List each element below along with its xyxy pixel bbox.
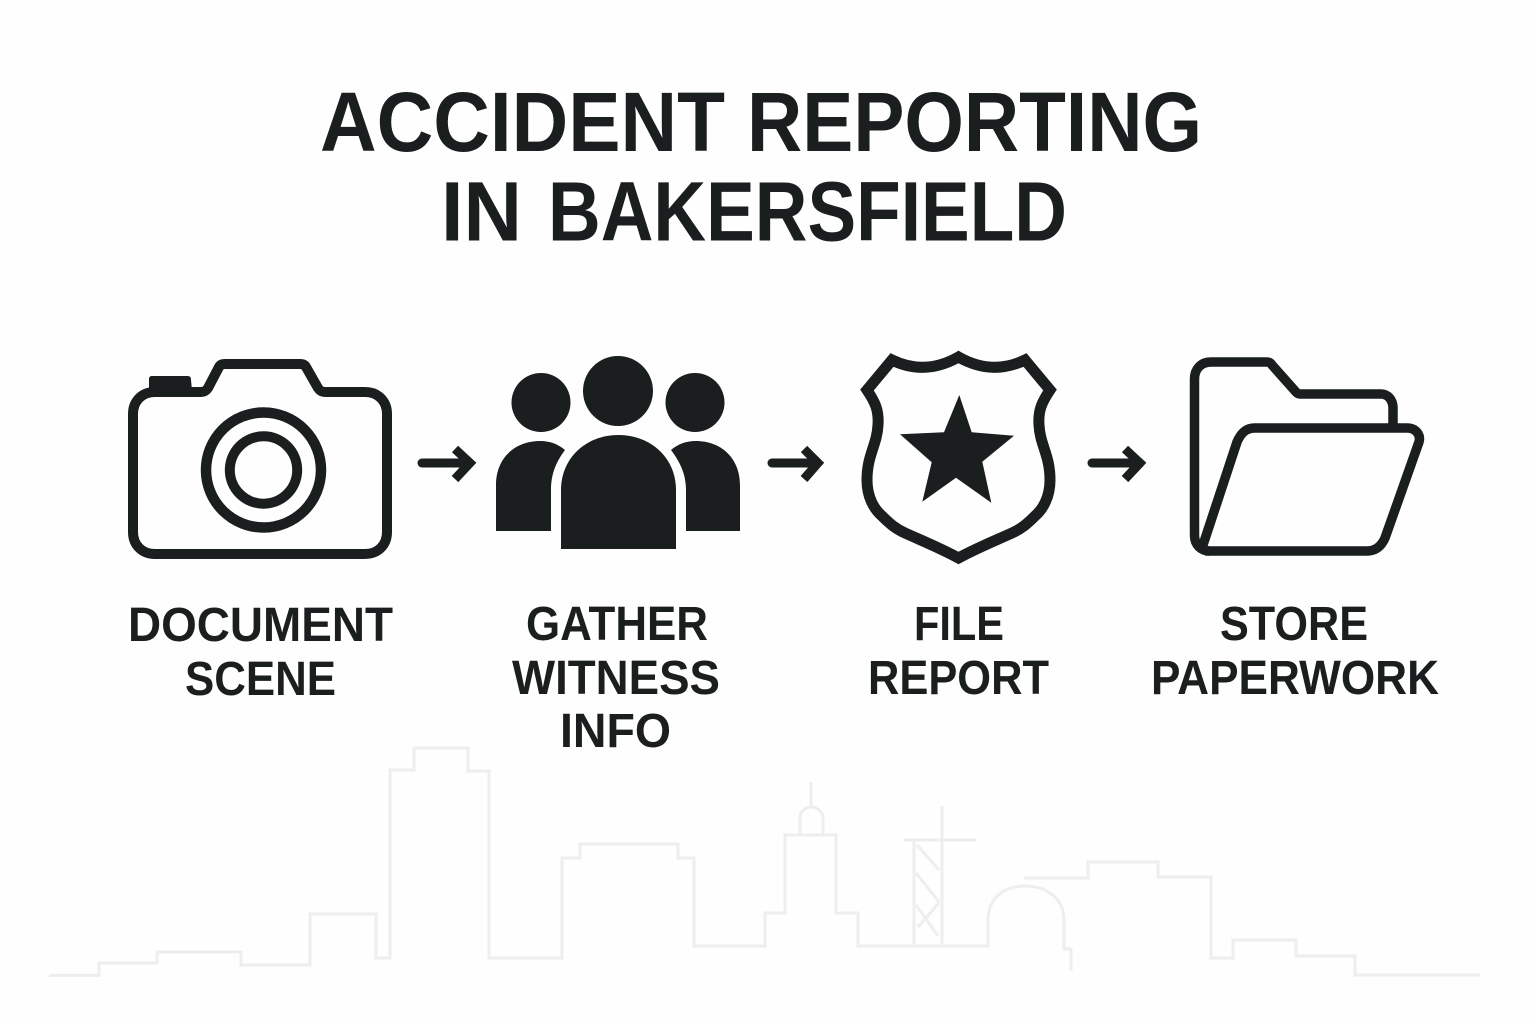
icon: three people [496,356,740,549]
icon: camera [133,364,387,554]
icon: police badge [867,357,1050,558]
arrow: report to paperwork [1092,449,1140,479]
label: store paperwork: PAPERWORK [1151,652,1439,705]
label: document scene [128,599,393,706]
title: REPORTING [747,75,1202,169]
label: gather witness info: WITNESS [512,652,720,705]
title: BAKERSFIELD [548,164,1067,258]
title [320,75,1202,258]
label: gather witness info: INFO [560,705,671,758]
label: store paperwork [1151,598,1439,705]
label: document scene: DOCUMENT [128,599,393,652]
title: IN [441,164,522,258]
arrow: document to witnesses [422,449,470,479]
arrow: witnesses to report [772,449,818,479]
label: document scene: SCENE [185,653,336,706]
label: store paperwork: STORE [1220,598,1368,651]
label: file report: REPORT [868,652,1049,705]
icon: folder [1194,362,1419,551]
label: gather witness info: GATHER [526,598,708,651]
label: gather witness info [512,598,720,758]
label: file report: FILE [914,598,1004,651]
skyline background [49,748,1480,976]
label: file report [868,598,1049,705]
title: ACCIDENT [320,75,725,169]
